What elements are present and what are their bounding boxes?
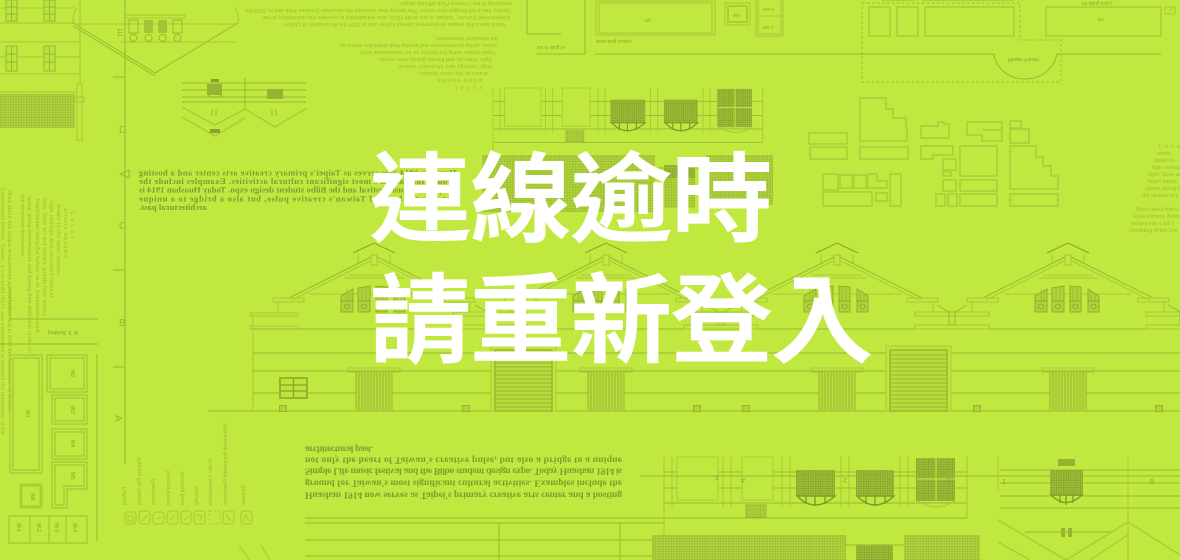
inverted gable with windows bbox=[73, 8, 238, 76]
left rotated text block: space, giving performances and leaving their distinctive marks on bbox=[26, 196, 32, 353]
title line 2: 請重新登入 bbox=[370, 268, 873, 376]
bottom-right section drawing bbox=[998, 457, 1180, 560]
rotated text block at top (upside down): Environment Reform, Taiwan, a non profit NGO, was established to oversee the restoration of the bbox=[263, 14, 510, 20]
bottom-left floor plan rooms: W-4 bbox=[71, 523, 77, 532]
small section drawing bbox=[182, 78, 307, 136]
upper paragraph mirrored: ground for Taiwan's most significant cultural activities. Examples include the bbox=[139, 176, 456, 186]
upper paragraph mirrored: Simple Life music festival and the Bilbo student design expo. Today Huashan 1914 is bbox=[138, 184, 456, 194]
valley joint 4 bbox=[1146, 305, 1180, 329]
legend: icons and labels: Security bbox=[194, 486, 200, 505]
valley joint 1 bbox=[453, 305, 527, 329]
dashed plan and Flower Forum: Flower Forum bbox=[1008, 56, 1039, 62]
left rotated text block: the structures themselves. bbox=[19, 195, 25, 258]
legend: icons and labels: Parking Pay Station bbox=[137, 458, 143, 505]
title line 1: 連線逾時 bbox=[370, 147, 772, 255]
right text block: Word about this u bbox=[1136, 207, 1178, 213]
rotated text block at top (upside down): light. Soon art and literary guests from across bbox=[379, 56, 491, 62]
right text block: drawn to bbox=[1154, 158, 1175, 164]
top centre plan rooms: M1 R. Bldg Nr bbox=[537, 45, 566, 50]
valley joint 3 bbox=[915, 305, 989, 329]
legend: icons and labels: Parking bbox=[122, 487, 128, 505]
bottom grid panels: 9 bbox=[947, 476, 951, 483]
left rotated text block: artists become bbox=[62, 208, 68, 258]
right text block: factory into a full f bbox=[1131, 221, 1174, 227]
gable unit 3 bbox=[736, 243, 938, 411]
lower paragraph flipped: not only the heart of Taiwan's creative pulse, but also a bridge to a unique bbox=[305, 454, 622, 464]
gable unit 2 bbox=[505, 243, 707, 411]
rotated text block at top (upside down): Word about this unique environment spread further and in 1997 the Association of Culture bbox=[283, 21, 505, 27]
bottom-left floor plan rooms: W5 bbox=[69, 472, 75, 480]
vertical axis with markers: B bbox=[119, 318, 126, 329]
top centre facade bbox=[493, 88, 763, 157]
bottom road lines bbox=[239, 518, 664, 560]
bottom grid panels bbox=[640, 475, 1180, 560]
upper paragraph mirrored: Huashan 1914 now serves as Taipei's primary creative arts center and a hosting bbox=[138, 168, 456, 178]
legend: icons and labels: Wheelchair Accessible Restrooms bbox=[223, 424, 229, 505]
rotated text block at top (upside down) bbox=[245, 0, 512, 90]
right text block bbox=[1129, 144, 1180, 234]
lower paragraph flipped: architectural past. bbox=[305, 444, 373, 454]
legend: icons and labels: Nursing Room bbox=[166, 471, 172, 506]
left rotated text block: high ceilings and abundant natural bbox=[48, 201, 54, 297]
bottom-left floor plan rooms: W-1 bbox=[15, 523, 21, 532]
left rotated text block: L o c a l bbox=[69, 212, 75, 238]
legend: icons and labels: Restrooms bbox=[151, 479, 157, 505]
top centre plan rooms: West Bldg Gallery bbox=[596, 39, 633, 44]
rolling door left bbox=[491, 346, 556, 411]
rotated text block at top (upside down): L o c a l bbox=[456, 84, 482, 90]
left rotated text block: Taipei began using the factory as an inspirational work bbox=[34, 198, 40, 333]
valley joint 2 bbox=[684, 305, 758, 329]
lower paragraph flipped bbox=[305, 444, 622, 500]
bottom-left floor plan rooms: M. lt. Building bbox=[48, 329, 78, 335]
top-left building elevation bbox=[0, 0, 84, 140]
legend: icons and labels: Under Construction bbox=[208, 459, 214, 505]
bottom-left floor plan rooms: W2 bbox=[69, 370, 75, 378]
lower paragraph flipped: Huashan 1914 now serves as Taipei's primary creative arts center and a hosting bbox=[305, 490, 622, 500]
centre lower grid panels bbox=[482, 155, 773, 212]
foundation vents bbox=[280, 406, 1162, 412]
lower paragraph flipped: ground for Taiwan's most significant cultural activities. Examples include the bbox=[305, 478, 622, 488]
bottom-left floor plan rooms: W-3 bbox=[53, 523, 59, 532]
vertical axis with markers bbox=[112, 0, 129, 464]
legend: icons and labels bbox=[122, 424, 252, 524]
bottom-left floor plan rooms: W4 bbox=[69, 440, 75, 448]
bottom-left floor plan rooms: W3 bbox=[69, 406, 75, 414]
top centre plan rooms: W4 bbox=[733, 13, 740, 18]
top centre plan rooms: M1 bbox=[645, 18, 652, 23]
left rotated text block: light. Soon art and literary guests from across bbox=[41, 198, 47, 316]
bottom grid panels: 4 bbox=[741, 476, 745, 483]
legend: icons and labels: Elevator bbox=[241, 485, 247, 505]
right text block: space, giving p bbox=[1145, 186, 1180, 192]
bottom-left floor plan rooms: W6 bbox=[29, 493, 35, 501]
bottom-right section drawing: 1 bbox=[1002, 479, 1006, 486]
rotated text block at top (upside down): rebuilding of the Creative Park officially began. bbox=[398, 0, 512, 6]
bottom-right section drawing: 9 bbox=[1150, 479, 1154, 486]
rotated text block at top (upside down): high ceilings and abundant natural bbox=[398, 63, 491, 69]
right text block: artists bbox=[1157, 151, 1172, 157]
vertical axis with markers: C bbox=[119, 221, 126, 232]
top centre plan rooms: W2-1 bbox=[763, 25, 774, 30]
vertical axis with markers: E bbox=[117, 28, 124, 39]
bottom grid panels: 1 bbox=[715, 475, 719, 482]
rotated text block at top (upside down): space, giving performances and leaving their distinctive marks on bbox=[340, 42, 497, 48]
rotated text block at top (upside down): Taipei began using the factory as an inspirational work bbox=[360, 49, 496, 55]
vertical axis with markers: A bbox=[112, 415, 123, 422]
top centre plan rooms: W2-3 bbox=[763, 7, 774, 12]
right text block: rebuilding of the Cre bbox=[1129, 228, 1178, 234]
gable unit 4 bbox=[967, 243, 1169, 411]
lower paragraph flipped: Simple Life music festival and the Bilbo student design expo. Today Huashan 1914 is bbox=[305, 466, 622, 476]
small window bbox=[280, 378, 307, 398]
rolling door right bbox=[886, 346, 951, 411]
rotated text block at top (upside down): drawn to the open spaces, bbox=[418, 70, 488, 76]
rotated text block at top (upside down): artists become bbox=[437, 77, 483, 83]
right text block: Taipei began bbox=[1147, 179, 1178, 185]
site plan blocks bbox=[809, 98, 1058, 206]
upper paragraph mirrored: not only the heart of Taiwan's creative pulse, but also a bridge to a unique bbox=[139, 194, 456, 204]
main warehouse elevation bbox=[208, 243, 1180, 412]
bottom facade bbox=[664, 457, 967, 535]
bottom grid panels: 2 bbox=[843, 476, 847, 483]
rotated text block at top (upside down): the structures themselves. bbox=[435, 35, 498, 41]
bottom-left floor plan rooms: W1 bbox=[24, 410, 30, 418]
title bbox=[370, 147, 873, 376]
left rotated text block: drawn to the open spaces, bbox=[55, 204, 61, 278]
dashed plan and Flower Forum: E5 (Bldg Entry) bbox=[1082, 1, 1113, 6]
top centre plan rooms bbox=[527, 0, 864, 54]
vertical axis with markers: D bbox=[119, 125, 126, 136]
rotated text block at top (upside down): factory into a full fledged arts center. The factory was renamed the Huashan Creative Park and in 2005 the bbox=[245, 7, 510, 13]
left rotated text block: Word about this unique environment spread further and in 1997 the Association of Culture bbox=[6, 190, 12, 412]
bottom-left floor plan rooms bbox=[0, 288, 98, 543]
dashed plan and Flower Forum bbox=[780, 0, 1175, 82]
dashed plan and Flower Forum: E3 bbox=[1098, 17, 1104, 22]
bottom-left floor plan rooms: W-2 bbox=[35, 523, 41, 532]
right text block: the structures t bbox=[1142, 193, 1178, 199]
upper paragraph mirrored: architectural past. bbox=[139, 202, 207, 212]
left rotated text block bbox=[0, 188, 75, 435]
gable unit 1 bbox=[273, 243, 475, 411]
legend: icons and labels: Smoking Area bbox=[180, 471, 186, 505]
upper paragraph mirrored bbox=[138, 168, 456, 212]
